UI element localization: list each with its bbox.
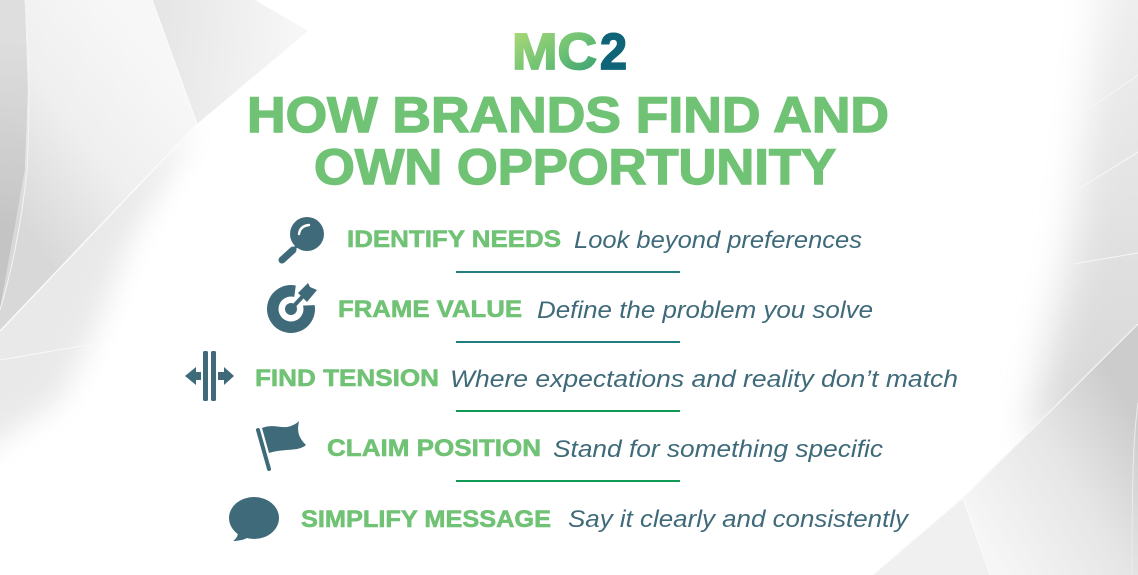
item: frame value: Define the problem you solve	[537, 297, 873, 324]
item: claim position: CLAIM POSITION	[327, 435, 541, 462]
item: find tension: FIND TENSION	[255, 365, 439, 392]
icon: magnifying glass	[282, 217, 324, 260]
title	[247, 87, 889, 195]
item: simplify message	[229, 497, 910, 541]
item: find tension	[185, 351, 958, 401]
item: simplify message: SIMPLIFY MESSAGE	[301, 506, 551, 533]
background: right folded paper	[873, 0, 1138, 575]
icon: flag	[258, 421, 306, 469]
logo: MC2	[512, 23, 627, 80]
icon: speech bubble	[229, 497, 279, 541]
background: left folded paper	[0, 0, 308, 480]
item: simplify message: Say it clearly and consistently	[568, 506, 910, 533]
item: frame value	[267, 283, 873, 333]
title: HOW BRANDS FIND AND	[247, 87, 889, 143]
logo: MC2: MC	[512, 23, 597, 80]
item: identify needs: IDENTIFY NEEDS	[347, 226, 561, 253]
logo: MC2: 2	[600, 23, 627, 80]
item: find tension: Where expectations and reality don’t match	[450, 366, 958, 393]
item: identify needs: Look beyond preferences	[574, 227, 862, 254]
item: claim position	[258, 421, 883, 469]
title: OWN OPPORTUNITY	[314, 139, 836, 195]
icon: opposing arrows and bars	[185, 351, 234, 401]
item: identify needs	[282, 217, 862, 260]
item: claim position: Stand for something specific	[553, 436, 883, 463]
item: frame value: FRAME VALUE	[338, 296, 522, 323]
icon: target with arrow	[267, 283, 322, 333]
